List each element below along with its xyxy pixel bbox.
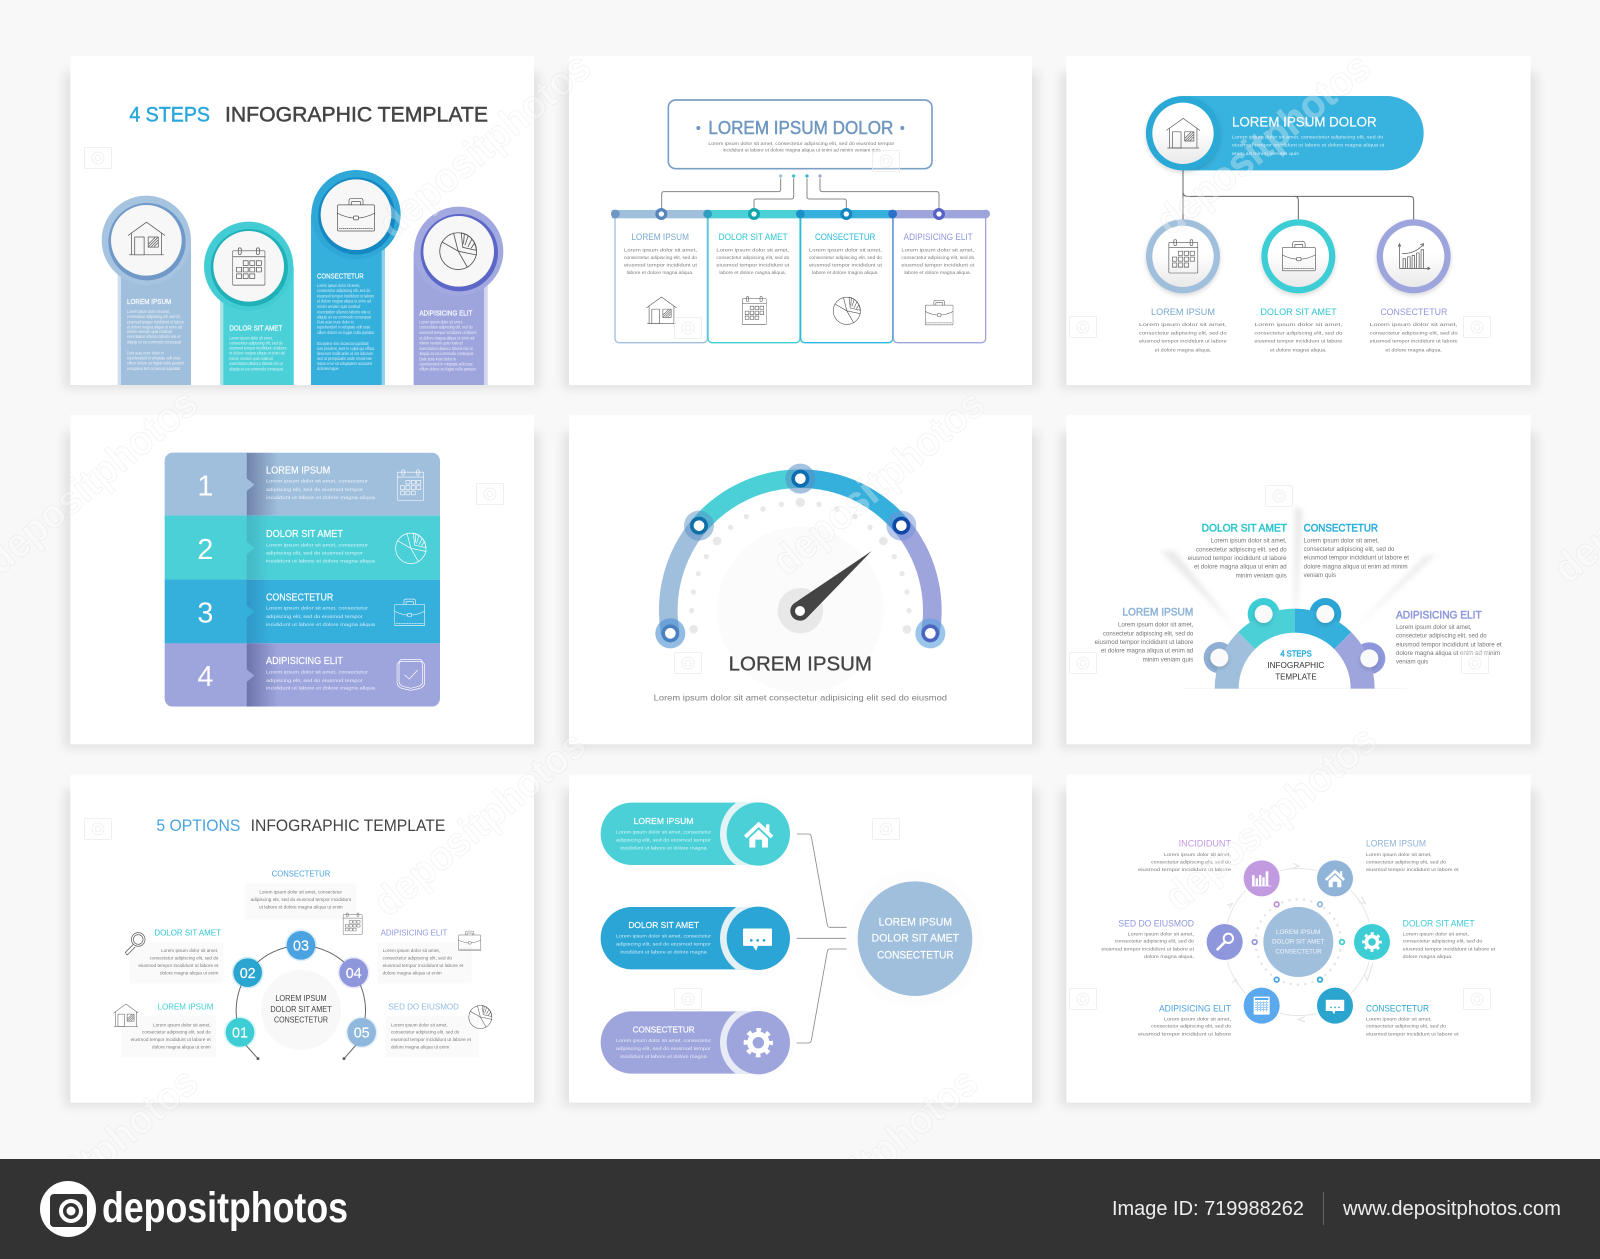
row 4: incididunt ut labore et dolore magna aliqua — [266, 686, 375, 691]
text: adipisicing elit: veniam quis — [1396, 660, 1428, 666]
card 3: eiusmod tempor incididunt ut — [809, 263, 883, 269]
text: consectetur: dolore magna aliqua ut enim ad minim — [1304, 564, 1408, 570]
card 2: DOLOR SIT AMET — [719, 232, 788, 242]
header pill: enim ad minim veniam quis — [1232, 151, 1300, 156]
item: adipisicing elit: ADIPISICING ELIT — [1159, 1003, 1231, 1013]
heading: 4 steps infographic template: INFOGRAPHIC TEMPLATE — [225, 102, 488, 126]
step 1 column: et dolore magna aliqua ut enim ad — [127, 324, 182, 329]
step 3 column: sed ut perspiciatis unde omnis iste — [317, 356, 372, 361]
icon: camera logo — [40, 1181, 96, 1237]
row 1: Lorem ipsum dolor sit amet, consectetur — [266, 479, 369, 484]
option: adipisicing elit: eiusmod tempor incididunt ut labore et — [383, 963, 464, 969]
node 2 — [1254, 219, 1343, 353]
option: lorem ipsum: consectetur adipiscing elit, sed do — [142, 1030, 211, 1036]
pill 1: Lorem ipsum dolor sit amet, consectetur — [616, 829, 712, 834]
item: dolor sit amet: dolore magna aliqua. — [1403, 954, 1453, 960]
row 4: adipiscing elit, sed do eiusmod tempor — [266, 678, 363, 683]
image id: Image ID: 719988262 — [1112, 1198, 1304, 1220]
text: consectetur: Lorem ipsum dolor sit amet, — [1304, 538, 1379, 544]
item: sed do eiusmod: dolore magna aliqua. — [1144, 954, 1194, 960]
step 4 column: ADIPISICING ELIT — [419, 310, 473, 317]
step 3 column: consectetur adipiscing elit, sed do — [317, 288, 371, 293]
node 3: et dolore magna aliqua. — [1385, 347, 1442, 353]
step 3 column: et dolore magna aliqua ut enim ad — [317, 299, 371, 304]
panel: half gear — [1060, 415, 1537, 749]
row 3: adipiscing elit, sed do eiusmod tempor — [266, 614, 363, 619]
option: lorem ipsum — [114, 1002, 216, 1057]
item: sed do eiusmod: Lorem ipsum dolor sit amet, — [1128, 931, 1194, 937]
node 3: eiusmod tempor incididunt ut labore — [1370, 339, 1458, 345]
card 2: consectetur adipiscing elit, sed do — [716, 255, 790, 261]
card 3: Lorem ipsum dolor sit amet, — [809, 248, 882, 254]
node 3 — [1370, 219, 1458, 353]
step 3 column: minim veniam quis nostrud — [317, 304, 361, 309]
numbered nodes: 01 — [232, 1026, 248, 1042]
item: adipisicing elit: eiusmod tempor incididunt ut labore — [1138, 1031, 1231, 1037]
text: lorem ipsum: eiusmod tempor incididunt ut labore — [1095, 640, 1194, 646]
centre label: INFOGRAPHIC — [1267, 660, 1324, 670]
step 3 column: reprehenderit in voluptate velit esse — [317, 325, 371, 330]
panel: outlined flow cards — [563, 56, 1039, 389]
pill 1 — [600, 802, 790, 866]
row 2: 2 — [197, 534, 213, 566]
step 2 column: DOLOR SIT AMET — [229, 326, 283, 333]
text: dolor sit amet — [1188, 523, 1287, 579]
centre label — [1267, 648, 1324, 682]
tick dots — [689, 498, 912, 634]
step 1 column: Lorem ipsum dolor sit amet, — [127, 309, 170, 314]
text: adipisicing elit: consectetur adipiscing elit, sed do — [1396, 634, 1487, 640]
step 1 column: excepteur sint occaecat cupidatat — [127, 366, 181, 371]
option: lorem ipsum: dolore magna aliqua ut enim — [152, 1044, 211, 1050]
step 4 column: Duis aute irure dolor in — [419, 356, 456, 361]
row 4: 4 — [197, 661, 213, 693]
item: adipisicing elit: Lorem ipsum dolor sit amet, — [1164, 1016, 1231, 1022]
option: consectetur: ut labore et dolore magna aliqua ut enim — [259, 904, 343, 910]
rows block — [165, 453, 440, 707]
step 1 column: reprehenderit in voluptate velit esse — [127, 355, 181, 360]
item: consectetur: eiusmod tempor incididunt ut labore et — [1366, 1031, 1459, 1037]
gauge caption: Lorem ipsum dolor sit amet consectetur adipisicing elit sed do eiusmod — [654, 693, 947, 703]
card 4: consectetur adipiscing elit, sed do — [901, 255, 975, 261]
pill 1: incididunt ut labore et dolore magna — [620, 845, 707, 850]
gauge nodes — [655, 464, 945, 648]
item: incididunt: Lorem ipsum dolor sit amet, — [1164, 852, 1231, 858]
text: lorem ipsum: consectetur adipiscing elit, sed do — [1103, 631, 1194, 637]
step 4 column: cillum dolore eu fugiat nulla pariatur — [419, 367, 476, 372]
row 1: 1 — [197, 470, 213, 502]
step 2 column: minim veniam quis nostrud — [229, 356, 273, 361]
centre circle: LOREM IPSUM — [275, 994, 327, 1003]
step 3 column: exercitation ullamco laboris nisi ut — [317, 309, 371, 314]
row 2: Lorem ipsum dolor sit amet, consectetur — [266, 542, 369, 547]
item: lorem ipsum: Lorem ipsum dolor sit amet, — [1366, 852, 1432, 858]
numbered nodes: 05 — [354, 1026, 370, 1042]
centre circle — [1263, 907, 1333, 977]
connectors — [662, 174, 939, 210]
item: lorem ipsum: eiusmod tempor incididunt ut labore et — [1366, 867, 1459, 873]
step 2 column: consectetur adipiscing elit, sed do — [229, 340, 283, 345]
card 3: consectetur adipiscing elit, sed do — [809, 255, 882, 261]
header pill — [1146, 96, 1424, 170]
row 2: adipiscing elit, sed do eiusmod tempor — [266, 551, 363, 556]
item: dolor sit amet: DOLOR SIT AMET — [1403, 918, 1475, 928]
panel: pill hierarchy — [1060, 56, 1537, 389]
row 1: LOREM IPSUM — [266, 465, 330, 476]
panel: 5 options arc — [64, 774, 540, 1107]
main circle — [847, 870, 983, 1007]
step 4 column — [414, 207, 503, 385]
pill 2: Lorem ipsum dolor sit amet, consectetur — [616, 934, 712, 939]
item: adipisicing elit — [1138, 986, 1282, 1037]
row 1: incididunt ut labore et dolore magna aliqua — [266, 495, 375, 500]
option: lorem ipsum: Lorem ipsum dolor sit amet, — [153, 1022, 211, 1028]
item: sed do eiusmod — [1101, 918, 1245, 962]
card 2: labore et dolore magna aliqua. — [719, 270, 786, 276]
tree connectors — [1183, 168, 1414, 222]
item: consectetur: CONSECTETUR — [1366, 1003, 1429, 1013]
pill 3: incididunt ut labore et dolore magna — [620, 1054, 707, 1059]
gauge dial background — [717, 527, 884, 693]
text: adipisicing elit: ADIPISICING ELIT — [1396, 609, 1482, 621]
watermark overlay: depositphotos — [364, 721, 594, 925]
footer bar — [0, 1159, 1600, 1259]
centre circle: DOLOR SIT AMET — [270, 1005, 332, 1014]
centre label: TEMPLATE — [1275, 672, 1317, 682]
step 2 column: eiusmod tempor incididunt ut labore — [229, 345, 287, 350]
card 2 — [703, 208, 800, 343]
item: adipisicing elit: consectetur adipiscing elit, sed do — [1151, 1024, 1231, 1030]
step 4 column: Lorem ipsum dolor sit amet, — [419, 320, 463, 325]
option: sed do eiusmod: dolore magna aliqua ut enim — [391, 1044, 449, 1050]
row 4: Lorem ipsum dolor sit amet, consectetur — [266, 670, 369, 675]
option: consectetur: CONSECTETUR — [272, 869, 330, 879]
option: adipisicing elit — [378, 928, 481, 983]
pill 2: incididunt ut labore et dolore magna — [620, 950, 707, 955]
item: sed do eiusmod: SED DO EIUSMOD — [1118, 918, 1194, 928]
card 3: CONSECTETUR — [815, 232, 876, 242]
pill 2: DOLOR SIT AMET — [628, 920, 700, 930]
row 1: adipiscing elit, sed do eiusmod tempor — [266, 487, 363, 492]
main circle: CONSECTETUR — [877, 949, 954, 961]
text: consectetur — [1304, 522, 1409, 579]
step 3 column — [311, 170, 401, 385]
step 3 column: non proident, sunt in culpa qui officia — [317, 346, 375, 351]
heading: 4 steps infographic template: 4 STEPS — [129, 102, 210, 126]
text: dolor sit amet: DOLOR SIT AMET — [1202, 523, 1287, 535]
pill 3 — [601, 1004, 797, 1081]
node 2: et dolore magna aliqua. — [1270, 347, 1327, 353]
header pill: eiusmod tempor incididunt ut labore et dolore magna aliqua ut — [1232, 143, 1385, 148]
panel: speedometer gauge — [563, 415, 1039, 749]
watermark overlay: depositphotos — [1147, 43, 1379, 244]
pill 3: CONSECTETUR — [633, 1024, 695, 1034]
panel: 4 steps columns — [64, 56, 540, 389]
text: consectetur: eiusmod tempor incididunt ut labore et — [1304, 556, 1409, 562]
node 3: consectetur adipiscing elit, sed do — [1370, 330, 1458, 336]
text: dolor sit amet: et dolore magna aliqua ut enim ad — [1194, 565, 1287, 571]
step 4 column: consectetur adipiscing elit, sed do — [419, 325, 473, 330]
numbered nodes: 04 — [346, 966, 362, 982]
header pill: Lorem ipsum dolor sit amet, consectetur adipiscing elit, sed do — [1232, 134, 1384, 139]
watermark overlay: depositphotos — [756, 1058, 986, 1259]
text: dolor sit amet: consectetur adipiscing elit, sed do — [1196, 547, 1287, 553]
row 3 — [165, 580, 440, 643]
item: lorem ipsum: LOREM IPSUM — [1366, 839, 1426, 849]
semicircle segments — [1183, 598, 1407, 689]
centre circle: LOREM IPSUM — [1276, 929, 1320, 936]
node 2: eiusmod tempor incididunt ut labore — [1254, 339, 1343, 345]
option: adipisicing elit: consectetur adipiscing elit, sed do — [383, 956, 452, 962]
gauge arc — [668, 479, 932, 633]
card 4: Lorem ipsum dolor sit amet, — [901, 248, 974, 254]
heading: 5 options infographic template: INFOGRAPHIC TEMPLATE — [251, 816, 445, 835]
card 4: labore et dolore magna aliqua. — [904, 270, 971, 276]
step 3 column: deserunt mollit anim id est laborum — [317, 351, 373, 356]
step 3 column: doloremque — [317, 366, 339, 371]
camera watermarks — [84, 148, 1490, 1010]
row 1 — [165, 453, 440, 516]
step 3 column: Lorem ipsum dolor sit amet, — [317, 283, 360, 288]
card 1 — [611, 208, 708, 343]
option: dolor sit amet — [125, 928, 223, 983]
main circle: DOLOR SIT AMET — [872, 933, 959, 945]
text: adipisicing elit — [1396, 609, 1502, 666]
row 2: incididunt ut labore et dolore magna aliqua — [266, 559, 375, 564]
centre circle: CONSECTETUR — [1275, 948, 1322, 955]
item: lorem ipsum: consectetur adipiscing elit, sed do — [1366, 859, 1446, 865]
step 2 column — [204, 222, 294, 385]
option: dolor sit amet: consectetur adipiscing elit, sed do — [150, 956, 219, 962]
option: consectetur: adipiscing elit, sed do eiusmod tempor incididunt — [251, 897, 352, 903]
row 3: incididunt ut labore et dolore magna aliqua — [266, 622, 375, 627]
item: lorem ipsum — [1315, 839, 1459, 898]
step 3 column: CONSECTETUR — [317, 274, 364, 281]
step 1 column: aliquip ex ea commodo consequat — [127, 339, 182, 344]
card 4: eiusmod tempor incididunt ut — [901, 263, 975, 269]
option: sed do eiusmod — [386, 1002, 492, 1057]
item: incididunt: consectetur adipiscing elit, sed do — [1151, 859, 1231, 865]
step 1 column — [102, 196, 191, 385]
pill 2: adipiscing elit, sed do eiusmod tempor — [616, 942, 712, 947]
step 1 column: consectetur adipiscing elit, sed do — [127, 314, 181, 319]
pill 1: adipiscing elit, sed do eiusmod tempor — [616, 837, 712, 842]
step 4 column: minim veniam quis nostrud — [419, 341, 463, 346]
step 1 column: minim veniam quis nostrud — [127, 329, 172, 334]
logo wordmark: depositphotos — [102, 1184, 348, 1232]
pill 3: Lorem ipsum dolor sit amet, consectetur — [616, 1038, 712, 1043]
text: consectetur: veniam quis — [1304, 573, 1336, 579]
panel: pills to circle — [563, 774, 1039, 1107]
needle — [778, 551, 872, 633]
option: lorem ipsum: eiusmod tempor incididunt ut labore et — [131, 1037, 211, 1043]
text: consectetur: consectetur adipiscing elit, sed do — [1304, 547, 1395, 553]
node 1: eiusmod tempor incididunt ut labore — [1139, 339, 1227, 345]
main circle: LOREM IPSUM — [879, 916, 952, 928]
card 1: consectetur adipiscing elit, sed do — [624, 255, 697, 261]
text: adipisicing elit: dolore magna aliqua ut enim ad minim — [1396, 651, 1500, 657]
step 3 column: natus error sit voluptatem accusant — [317, 361, 373, 366]
node 2: Lorem ipsum dolor sit amet, — [1254, 322, 1342, 328]
option: adipisicing elit: Lorem ipsum dolor sit amet, — [383, 948, 440, 954]
card 1: LOREM IPSUM — [631, 232, 689, 242]
text: lorem ipsum: Lorem ipsum dolor sit amet, — [1118, 623, 1194, 629]
pill 3: adipiscing elit, sed do eiusmod tempor — [616, 1046, 712, 1051]
step 3 column: Duis aute irure dolor in — [317, 320, 354, 325]
website: www.depositphotos.com — [1342, 1198, 1561, 1220]
text: adipisicing elit: eiusmod tempor incididunt ut labore et — [1396, 642, 1502, 648]
text: dolor sit amet: minim veniam quis — [1236, 573, 1287, 579]
step 3 column: aliquip ex ea commodo consequat — [317, 314, 372, 319]
step 3 column: Excepteur sint occaecat cupidatat — [317, 341, 369, 346]
option: sed do eiusmod: SED DO EIUSMOD — [388, 1002, 459, 1012]
option: dolor sit amet: dolore magna aliqua ut enim — [160, 970, 218, 976]
cycle ring — [1225, 863, 1373, 1022]
step 1 column: eiusmod tempor incididunt ut labore — [127, 319, 184, 324]
card 4: ADIPISICING ELIT — [904, 232, 973, 242]
item: dolor sit amet: consectetur adipiscing elit, sed do — [1403, 939, 1483, 945]
step 2 column: exercitation ullamco laboris nisi ut — [229, 361, 283, 366]
heading: 5 options infographic template: 5 OPTIONS — [156, 816, 240, 835]
row 2 — [165, 516, 440, 580]
option: consectetur — [245, 869, 362, 935]
option: lorem ipsum: LOREM IPSUM — [158, 1002, 213, 1012]
header box: Lorem ipsum dolor sit amet, consectetur adipiscing elit, sed do eiusmod tempor — [708, 141, 895, 147]
connectors — [797, 834, 847, 1043]
node 2: DOLOR SIT AMET — [1260, 307, 1337, 317]
option: sed do eiusmod: Lorem ipsum dolor sit amet, — [391, 1022, 448, 1028]
header box: LOREM IPSUM DOLOR — [708, 117, 893, 138]
step 3 column: cillum dolore eu fugiat nulla pariatur — [317, 330, 375, 335]
watermark overlay: depositphotos — [1155, 716, 1385, 920]
centre label: 4 STEPS — [1280, 648, 1312, 658]
small ring markers — [1252, 902, 1344, 982]
option: dolor sit amet: DOLOR SIT AMET — [154, 928, 222, 938]
text: dolor sit amet: eiusmod tempor incididunt ut labore — [1188, 556, 1287, 562]
row 3: CONSECTETUR — [266, 593, 333, 604]
option: sed do eiusmod: eiusmod tempor incididunt ut labore et — [391, 1037, 472, 1043]
card 4 — [888, 208, 990, 343]
row 2: DOLOR SIT AMET — [266, 529, 343, 540]
card 3: labore et dolore magna aliqua. — [812, 270, 879, 276]
option: adipisicing elit: dolore magna aliqua ut enim — [383, 970, 442, 976]
centre circle: DOLOR SIT AMET — [1272, 939, 1324, 946]
text: adipisicing elit: Lorem ipsum dolor sit amet, — [1396, 625, 1472, 631]
pill 2 — [600, 906, 790, 970]
panel: numbered rows — [64, 415, 540, 749]
text: lorem ipsum: minim veniam quis — [1143, 657, 1193, 663]
node 1: et dolore magna aliqua. — [1155, 347, 1211, 353]
step 1 column: LOREM IPSUM — [127, 299, 171, 306]
node 1: LOREM IPSUM — [1151, 307, 1215, 317]
watermark overlay: depositphotos — [763, 380, 993, 584]
item: incididunt: eiusmod tempor incididunt ut labore — [1138, 867, 1231, 873]
text: dolor sit amet: Lorem ipsum dolor sit amet, — [1211, 539, 1287, 545]
step 3 column: eiusmod tempor incididunt ut labore — [317, 293, 375, 298]
centre circle — [261, 970, 341, 1050]
item: dolor sit amet: eiusmod tempor incididunt ut labore et — [1403, 946, 1496, 952]
heading: 5 options infographic template — [156, 816, 445, 835]
row 3: 3 — [197, 597, 213, 629]
pill 1: LOREM IPSUM — [634, 816, 693, 826]
item: incididunt — [1138, 839, 1282, 898]
step 2 column: aliquip ex ea commodo consequat — [229, 366, 284, 371]
option: consectetur: Lorem ipsum dolor sit amet, consectetur — [259, 890, 342, 896]
item: sed do eiusmod: eiusmod tempor incididunt ut labore et — [1101, 946, 1195, 952]
node 1: consectetur adipiscing elit, sed do — [1139, 330, 1227, 336]
gauge title: LOREM IPSUM — [729, 653, 872, 676]
step 4 column: eiusmod tempor incididunt ut labore — [419, 330, 477, 335]
node 1: Lorem ipsum dolor sit amet, — [1139, 322, 1227, 328]
item: consectetur — [1315, 986, 1459, 1037]
row 3: Lorem ipsum dolor sit amet, consectetur — [266, 606, 369, 611]
header pill: LOREM IPSUM DOLOR — [1232, 115, 1377, 130]
row 4: ADIPISICING ELIT — [266, 656, 343, 667]
node 2: consectetur adipiscing elit, sed do — [1254, 330, 1343, 336]
numbered nodes: 02 — [240, 966, 256, 982]
item: consectetur: consectetur adipiscing elit, sed do — [1366, 1024, 1446, 1030]
item: incididunt: INCIDIDUNT — [1179, 839, 1232, 849]
item: dolor sit amet: Lorem ipsum dolor sit amet, — [1403, 931, 1469, 937]
step 4 column: reprehenderit in voluptate velit esse — [419, 361, 473, 366]
text: lorem ipsum — [1095, 607, 1194, 663]
text: consectetur: CONSECTETUR — [1304, 522, 1378, 534]
card 1: eiusmod tempor incididunt ut — [624, 263, 698, 269]
item: dolor sit amet — [1352, 918, 1496, 962]
step 1 column: cillum dolore eu fugiat nulla pariatur — [127, 361, 184, 366]
text: lorem ipsum: LOREM IPSUM — [1122, 607, 1193, 619]
fold shadows — [1160, 507, 1437, 631]
panel: cycle diagram — [1060, 774, 1537, 1107]
watermark overlay: depositphotos — [369, 43, 599, 247]
option: sed do eiusmod: consectetur adipiscing elit, sed do — [391, 1030, 460, 1036]
numbered nodes: 03 — [293, 939, 309, 955]
item: sed do eiusmod: consectetur adipiscing elit, sed do — [1115, 939, 1194, 945]
card 3 — [796, 208, 893, 343]
row 4 — [165, 643, 440, 707]
numbered nodes — [224, 929, 378, 1048]
header box — [668, 100, 932, 169]
card 1: Lorem ipsum dolor sit amet, — [624, 248, 697, 254]
step 4 column: et dolore magna aliqua ut enim ad — [419, 335, 475, 340]
step 1 column: exercitation ullamco laboris nisi ut — [127, 334, 181, 339]
centre circle: CONSECTETUR — [274, 1016, 328, 1025]
header box: incididunt ut labore et dolore magna aliqua ut enim ad minim veniam quis — [723, 148, 881, 154]
text: lorem ipsum: et dolore magna aliqua ut enim ad — [1101, 649, 1193, 655]
card 2: Lorem ipsum dolor sit amet, — [716, 248, 789, 254]
node 3: Lorem ipsum dolor sit amet, — [1370, 322, 1458, 328]
option: dolor sit amet: eiusmod tempor incididunt ut labore et — [138, 963, 219, 969]
card 2: eiusmod tempor incididunt ut — [716, 263, 790, 269]
node 1 — [1139, 219, 1227, 353]
card 1: labore et dolore magna aliqua. — [627, 270, 693, 276]
step 1 column: Duis aute irure dolor in — [127, 350, 164, 355]
step 2 column: Lorem ipsum dolor sit amet, — [229, 335, 273, 340]
step 4 column: aliquip ex ea commodo consequat — [419, 351, 474, 356]
step 4 column: exercitation ullamco laboris nisi ut — [419, 346, 473, 351]
option: adipisicing elit: ADIPISICING ELIT — [381, 928, 448, 938]
option: dolor sit amet: Lorem ipsum dolor sit amet, — [161, 948, 218, 954]
step 2 column: et dolore magna aliqua ut enim ad — [229, 351, 285, 356]
item: consectetur: Lorem ipsum dolor sit amet, — [1366, 1016, 1432, 1022]
arc connector — [236, 946, 365, 1060]
node 3: CONSECTETUR — [1380, 307, 1448, 317]
